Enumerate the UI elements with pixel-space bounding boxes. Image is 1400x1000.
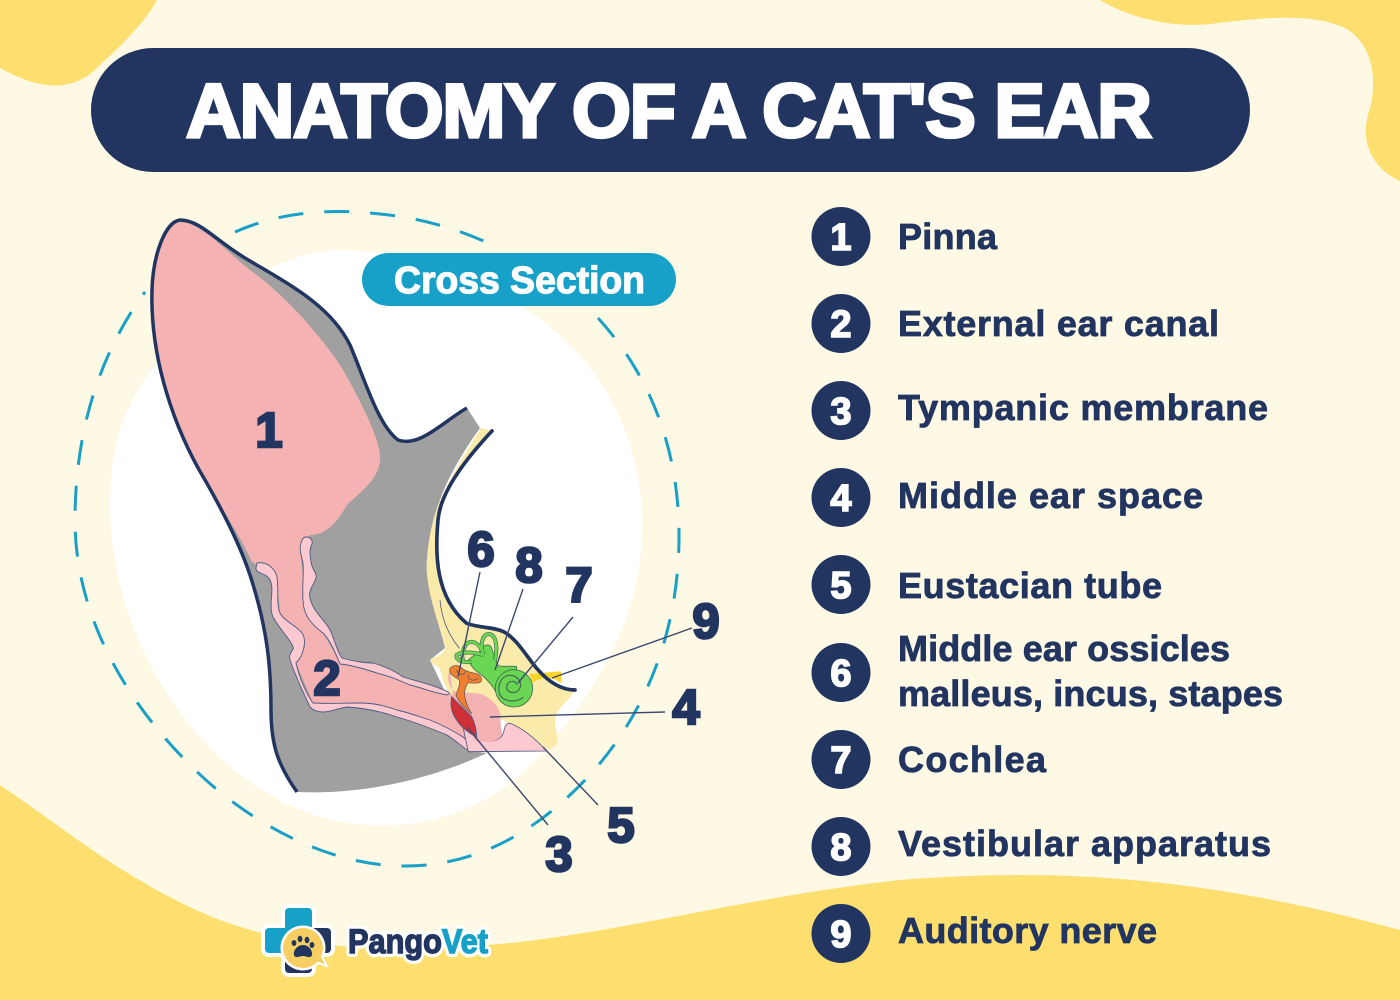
legend item 7: Cochlea (898, 739, 1047, 780)
diagram number labels: 9 (692, 595, 720, 649)
middle ear ossicles (450, 666, 481, 714)
legend item 8 (812, 817, 1271, 876)
cross section label (362, 253, 676, 306)
legend item 1: 1 (830, 217, 852, 259)
legend item 4 (812, 468, 1203, 527)
ear cross-section diagram (152, 220, 575, 792)
dashed circle (75, 211, 679, 866)
diagram number labels: 1 (255, 404, 283, 458)
legend item 7 (812, 730, 1047, 789)
white blob backdrop (110, 250, 642, 825)
diagram number labels: 2 (313, 652, 341, 706)
corner blob: top left (0, 0, 157, 86)
legend item 4: Middle ear space (898, 475, 1203, 516)
logo wordmark: PangoVet (348, 923, 488, 961)
legend item 1: Pinna (898, 216, 998, 257)
cross section label: Cross Section (394, 260, 645, 302)
legend item 9: Auditory nerve (898, 910, 1157, 951)
diagram number labels: 4 (672, 681, 700, 735)
skull outline (437, 431, 575, 690)
leader lines (458, 572, 692, 825)
vestibular apparatus (468, 645, 517, 702)
inner ear bone (427, 428, 575, 749)
legend item 3: Tympanic membrane (898, 387, 1268, 428)
cochlea (495, 670, 533, 707)
tympanic membrane (451, 697, 477, 737)
logo wordmark: PangoVet (348, 923, 488, 961)
logo icon: cross with paw bubble (265, 908, 331, 973)
legend item 1 (812, 207, 998, 266)
semicircular canals (456, 634, 496, 662)
legend item 6: 6 (830, 653, 852, 695)
inner ear group (427, 428, 575, 752)
legend item 6: Middle ear ossicles (898, 628, 1230, 669)
ear outline (152, 220, 467, 792)
legend item 9 (812, 904, 1157, 963)
diagram number labels: 3 (545, 828, 573, 882)
legend item 9: 9 (830, 914, 852, 956)
PangoVet logo (265, 908, 488, 973)
legend item 2: External ear canal (898, 303, 1219, 344)
corner blob: top right (1100, 0, 1400, 181)
title banner: ANATOMY OF A CAT'S EAR (186, 69, 1152, 154)
legend item 2 (812, 294, 1219, 353)
lower canal wall (256, 563, 480, 752)
legend item 6 (812, 628, 1283, 714)
head tissue (152, 220, 487, 792)
legend item 6: malleus, incus, stapes (898, 673, 1283, 714)
bone detail line (440, 600, 459, 648)
legend item 5: 5 (830, 565, 852, 607)
legend item 7: 7 (830, 740, 852, 782)
legend item 3 (812, 381, 1268, 440)
legend item 3: 3 (830, 391, 852, 433)
bottom wave (0, 785, 1400, 1000)
legend item 2: 2 (830, 304, 852, 346)
middle ear space (448, 670, 502, 742)
legend item 8: 8 (830, 827, 852, 869)
title banner (91, 48, 1250, 172)
pinna and canal fill (152, 222, 485, 742)
legend list (812, 207, 1283, 963)
upper canal wall (300, 537, 450, 695)
eustachian tube (463, 723, 547, 752)
legend item 8: Vestibular apparatus (898, 823, 1271, 864)
auditory nerve (529, 672, 562, 683)
diagram number labels: 5 (607, 799, 635, 853)
diagram number labels (255, 404, 720, 882)
legend item 4: 4 (830, 478, 852, 520)
diagram number labels: 7 (565, 559, 593, 613)
legend item 5 (812, 555, 1162, 614)
diagram number labels: 6 (467, 523, 495, 577)
legend item 5: Eustacian tube (898, 565, 1162, 606)
diagram number labels: 8 (515, 539, 543, 593)
